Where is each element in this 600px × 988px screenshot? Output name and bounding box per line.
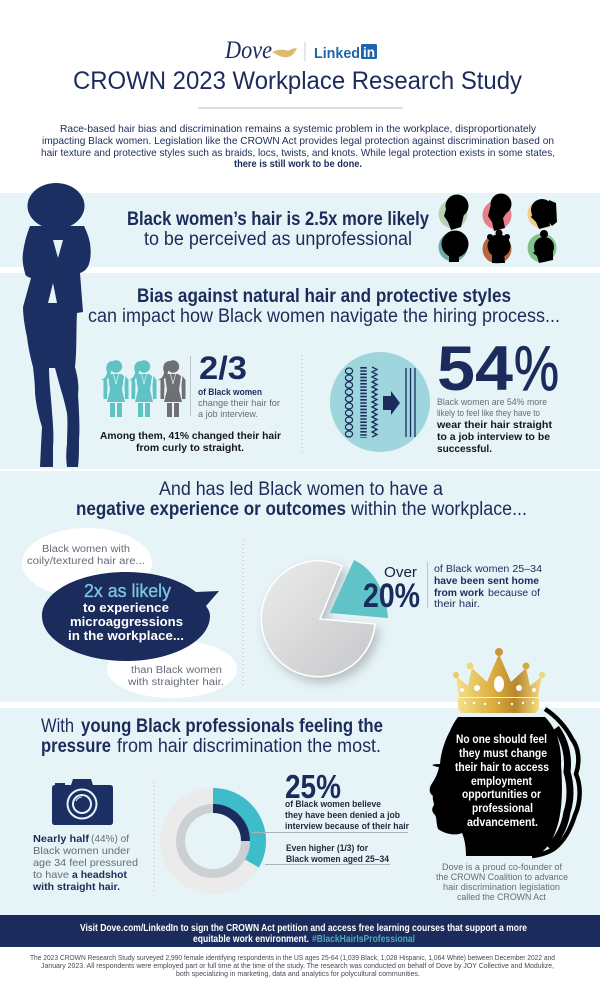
text: no one should feel: professional xyxy=(472,803,533,815)
hair profile: rust xyxy=(482,230,512,264)
text: navy bubble body: microaggressions xyxy=(70,614,183,629)
title rule xyxy=(198,108,403,109)
text: navy bubble body: to experience xyxy=(83,600,169,615)
hair profile: orange xyxy=(528,199,557,229)
text: even higher: Even higher (1/3) for xyxy=(286,843,368,854)
logo: LinkedIn: Linked xyxy=(314,45,360,62)
text: nearly half: Nearly half xyxy=(33,833,90,845)
text: Dove co-founder note: called the CROWN Act xyxy=(457,892,546,903)
stat: 25%: 25% xyxy=(285,768,341,805)
text: Dove co-founder note: Dove is a proud co-founder of xyxy=(442,862,562,873)
heading: young professionals: from hair discrimination the most. xyxy=(117,736,381,757)
heading: hiring process: Bias against natural hair and protective styles xyxy=(137,286,511,307)
intro paragraph: Race-based hair bias and discrimination remains a systemic problem in the workplace, disproportionately xyxy=(60,123,537,135)
stat: 2/3: 2/3 xyxy=(199,350,247,386)
divider: 20% xyxy=(427,562,428,608)
text: even higher xyxy=(286,843,390,865)
text: 25% description: of Black women believe xyxy=(285,799,381,810)
inner arc: 25% xyxy=(213,808,246,841)
stat: over 20% xyxy=(363,564,420,615)
inner ring track xyxy=(180,808,246,874)
text: nearly half: to have xyxy=(33,869,69,881)
footnote xyxy=(30,953,555,978)
logo divider xyxy=(304,42,306,61)
curls column xyxy=(345,368,353,437)
silhouette: standing woman xyxy=(23,183,91,467)
text: 2/3 description: change their hair for xyxy=(198,398,280,409)
text: 54% description: successful. xyxy=(437,443,492,455)
icon: gold dove bird xyxy=(272,48,297,57)
text: among them 41% xyxy=(100,430,281,454)
hair profile: teal xyxy=(438,230,468,262)
title: CROWN 2023 Workplace Research Study xyxy=(73,67,522,95)
white bubble top xyxy=(22,528,152,598)
text: 20% description: have been sent home xyxy=(434,576,539,587)
navy bubble xyxy=(42,572,219,661)
text: Dove co-founder note xyxy=(436,862,568,903)
heading: young professionals: young Black professionals feeling the xyxy=(81,716,383,737)
text: 20% description: because of xyxy=(488,588,540,599)
text: no one should feel: employment xyxy=(471,776,532,788)
text: nearly half xyxy=(32,833,138,893)
silhouette: head with braids xyxy=(430,709,580,856)
text: 2/3 description: a job interview. xyxy=(198,409,258,420)
pie chart: over 20% xyxy=(261,560,388,677)
intro paragraph: there is still work to be done. xyxy=(234,158,362,170)
text: 2/3 description: of Black women xyxy=(198,387,262,398)
text: nearly half: a headshot xyxy=(72,869,127,881)
hair profile: pink xyxy=(482,194,512,231)
text: 20% description: from work xyxy=(434,588,484,599)
text: no one should feel: they must change xyxy=(459,748,547,760)
heading: young professionals: pressure xyxy=(41,736,111,757)
text: 54% description: likely to feel like they have to xyxy=(437,408,540,419)
heading: negative experience: negative experience or outcomes xyxy=(76,499,346,520)
footnote: both specializing in marketing, data and analytics for polycultural communities. xyxy=(176,969,420,978)
straight hair lines xyxy=(406,368,415,437)
intro paragraph: hair texture and protective styles such as braids, locs, twists, and knots. While legal protection exists in some states, xyxy=(41,147,555,159)
pie: 20% slice xyxy=(330,560,388,618)
text: 20% description: their hair. xyxy=(434,599,480,610)
heading: young professionals: With xyxy=(41,716,74,737)
callout lines xyxy=(252,832,408,864)
heading: negative experience: And has led Black women to have a xyxy=(159,479,443,500)
divider: 2/3 xyxy=(190,356,191,416)
intro paragraph: impacting Black women. Legislation like the CROWN Act provides legal protection against discrimination based on xyxy=(42,135,554,147)
text: 25% description: they have been denied a job xyxy=(285,810,400,821)
header logos xyxy=(224,37,377,64)
text: no one should feel: advancement. xyxy=(467,817,538,829)
heading: negative experience: within the workplace... xyxy=(350,499,527,520)
stat: over 20%: Over xyxy=(384,564,417,581)
stat: 54%: 54 xyxy=(437,334,513,404)
heading: hiring process xyxy=(88,286,560,327)
text: nearly half: Black women under xyxy=(33,845,131,857)
text: no one should feel: their hair to access xyxy=(455,762,549,774)
icon: camera xyxy=(52,779,113,825)
text: 2x as likely: 2x as likely xyxy=(84,581,171,601)
text: Dove co-founder note: the CROWN Coalition to advance xyxy=(436,872,568,883)
text: nearly half: (44%) of xyxy=(91,833,129,845)
text: among them 41%: from curly to straight. xyxy=(136,442,244,454)
heading: young professionals xyxy=(41,716,383,757)
text: 54% description: to a job interview to be xyxy=(437,431,550,443)
arrow xyxy=(383,391,400,415)
text: nearly half: with straight hair. xyxy=(32,881,120,893)
text: top bubble: coily/textured hair are... xyxy=(27,556,145,567)
text: nearly half: age 34 feel pressured xyxy=(33,857,138,869)
text: even higher: Black women aged 25–34 xyxy=(286,854,390,865)
text: bottom bubble xyxy=(127,665,224,688)
tight coil column xyxy=(360,367,367,438)
band: young professionals xyxy=(0,708,600,915)
intro paragraph xyxy=(41,123,555,170)
text: navy bubble body: in the workplace... xyxy=(68,628,184,643)
icon: gold crown xyxy=(453,648,545,713)
text: bottom bubble: than Black women xyxy=(131,665,222,676)
text: Dove co-founder note: hair discrimination legislation xyxy=(443,882,560,893)
outer arc: one third xyxy=(213,796,258,864)
band: workplace outcomes xyxy=(0,471,600,702)
stat: 54% xyxy=(437,334,559,404)
logo: LinkedIn: in xyxy=(363,44,375,60)
hair profile: green bun xyxy=(528,230,556,263)
heading: 2.5x more likely xyxy=(127,209,429,250)
text: navy bubble body xyxy=(68,600,184,643)
text: CTA: #BlackHairIsProfessional xyxy=(312,933,415,945)
text: top bubble: Black women with xyxy=(42,544,130,555)
text: 25% description xyxy=(285,799,409,832)
text: no one should feel: No one should feel xyxy=(456,734,547,746)
text: CTA xyxy=(80,922,527,945)
text: no one should feel xyxy=(455,734,549,829)
icon: three women, two highlighted xyxy=(101,360,186,417)
text: 25% description: interview because of their hair xyxy=(285,821,409,832)
zigzag column xyxy=(372,367,377,437)
text: 54% description: Black women are 54% more xyxy=(437,397,547,408)
heading: 2.5x more likely: Black women’s hair is 2.5x more likely xyxy=(127,209,429,230)
hair profile: green xyxy=(438,194,468,230)
white bubble bottom xyxy=(107,640,237,698)
stat: 54%: % xyxy=(514,334,559,404)
text: 54% description xyxy=(436,397,553,455)
text: 20% description: of Black women 25–34 xyxy=(434,564,542,575)
text: 20% description xyxy=(434,564,542,610)
logo: Dove: Dove xyxy=(224,37,272,64)
speech bubbles: microaggressions xyxy=(22,528,237,698)
text: CTA: equitable work environment. xyxy=(193,933,309,945)
outer ring track xyxy=(168,796,258,886)
pie: remaining share xyxy=(261,561,375,677)
band: hiring process xyxy=(0,273,600,469)
call to action bar xyxy=(0,915,600,947)
heading: 2.5x more likely: to be perceived as unprofessional xyxy=(144,229,412,250)
icons: six hair silhouettes xyxy=(438,194,557,264)
icon: curly to straight hair circle xyxy=(330,352,430,452)
heading: negative experience xyxy=(76,479,527,520)
text: top bubble xyxy=(27,544,145,567)
footnote: January 2023. All respondents were employed part or full time at the time of the study. The research was conducted on behalf of Dove by JOY Collective and Modulize, xyxy=(41,961,554,970)
band: unprofessional perception xyxy=(0,193,600,267)
text: among them 41%: Among them, 41% changed their hair xyxy=(100,430,281,442)
donut chart: 25% and one third xyxy=(168,796,258,886)
heading: hiring process: can impact how Black women navigate the hiring process... xyxy=(88,306,560,327)
text: bottom bubble: with straighter hair. xyxy=(127,677,224,688)
text: 2/3 description xyxy=(198,387,280,420)
text: 54% description: wear their hair straight xyxy=(436,419,553,431)
stat: over 20%: 20% xyxy=(363,577,420,615)
text: no one should feel: opportunities or xyxy=(462,789,541,801)
